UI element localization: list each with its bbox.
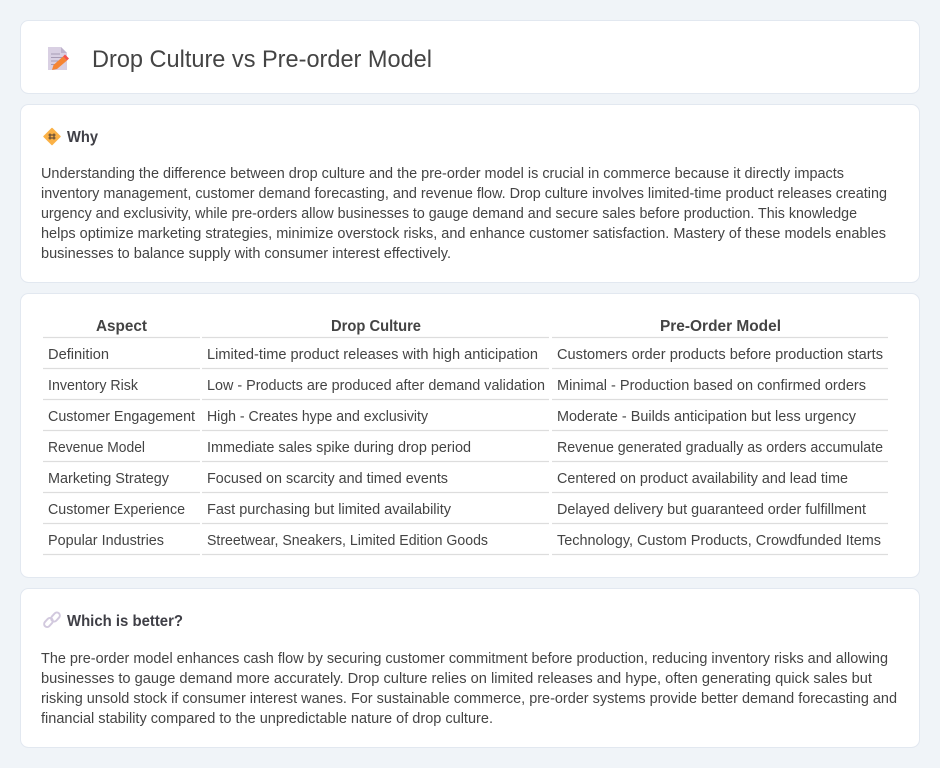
row: popular industries: Streetwear, Sneakers, Limited Edition Goods bbox=[207, 533, 488, 549]
table header bbox=[43, 318, 888, 338]
panel: comparison table bbox=[20, 294, 920, 578]
icon: document with pencil bbox=[48, 47, 69, 70]
row: customer engagement: High - Creates hype and exclusivity bbox=[207, 409, 429, 425]
row: customer engagement: Moderate - Builds anticipation but less urgency bbox=[557, 409, 857, 425]
row: customer engagement: Customer Engagement bbox=[48, 409, 195, 425]
row: customer experience: Customer Experience bbox=[48, 502, 185, 518]
row: revenue model: Revenue generated gradually as orders accumulate bbox=[557, 440, 883, 456]
table header: Pre-Order Model bbox=[660, 318, 781, 335]
row: definition: Customers order products before production starts bbox=[557, 347, 883, 363]
row: inventory risk: Low - Products are produced after demand validation bbox=[207, 378, 545, 394]
text block: why: Understanding the difference between drop culture and the pre-order model is crucial in commerce because it directly impacts bbox=[41, 166, 844, 182]
text block: which is better: businesses to gauge demand more accurately. Drop culture relies on limited releases and hype, often generating quick sales but bbox=[41, 671, 872, 687]
text block: which is better bbox=[41, 651, 897, 727]
panel: title bbox=[20, 20, 920, 94]
panel: which is better bbox=[20, 588, 920, 748]
text block: why bbox=[41, 166, 887, 262]
row: customer experience: Delayed delivery but guaranteed order fulfillment bbox=[557, 502, 866, 518]
row: customer experience: Fast purchasing but limited availability bbox=[207, 502, 452, 518]
text block: why: urgency and exclusivity, while pre-orders allow businesses to gauge demand and secure sales before production. This knowledge bbox=[41, 206, 857, 222]
row: revenue model: Revenue Model bbox=[48, 440, 145, 456]
icon: link bbox=[43, 611, 61, 628]
row: popular industries: Popular Industries bbox=[48, 533, 164, 549]
row: popular industries: Technology, Custom Products, Crowdfunded Items bbox=[557, 533, 881, 549]
text block: which is better: The pre-order model enhances cash flow by securing customer commitment before production, reducing inventory risks and allowing bbox=[41, 651, 888, 667]
text block: why: businesses to balance supply with consumer interest effectively. bbox=[41, 246, 451, 262]
row: definition: Limited-time product releases with high anticipation bbox=[207, 347, 538, 363]
row: inventory risk: Inventory Risk bbox=[48, 378, 139, 394]
title text: Drop Culture vs Pre-order Model bbox=[92, 46, 432, 73]
text block: which is better: financial stability compared to the unpredictable nature of drop culture. bbox=[41, 711, 493, 727]
panel: why bbox=[20, 104, 920, 282]
row: definition bbox=[43, 347, 888, 368]
row: marketing strategy: Marketing Strategy bbox=[48, 471, 170, 487]
row: marketing strategy: Focused on scarcity and timed events bbox=[207, 471, 448, 487]
row: revenue model: Immediate sales spike during drop period bbox=[207, 440, 471, 456]
row: customer experience bbox=[43, 502, 888, 524]
row: inventory risk: Minimal - Production based on confirmed orders bbox=[557, 378, 866, 394]
text block: why: inventory management, customer demand forecasting, and revenue flow. Drop culture involves limited-time product releases creating bbox=[41, 186, 887, 202]
row: customer engagement bbox=[43, 409, 888, 430]
text block: why: helps optimize marketing strategies, minimize overstock risks, and enhance customer satisfaction. Mastery of these models enables bbox=[41, 226, 886, 242]
text block: which is better: risking unsold stock if consumer interest wanes. For sustainable commerce, pre-order systems provide better demand forecasting and bbox=[41, 691, 897, 707]
row: definition: Definition bbox=[48, 347, 109, 363]
table header: Drop Culture bbox=[331, 318, 421, 335]
row: revenue model bbox=[43, 440, 888, 462]
heading: which is better: Which is better? bbox=[67, 613, 183, 630]
icon: warning diamond bbox=[44, 128, 60, 144]
heading: why: Why bbox=[67, 129, 98, 146]
row: popular industries bbox=[43, 533, 888, 554]
row: inventory risk bbox=[43, 378, 888, 400]
row: marketing strategy: Centered on product availability and lead time bbox=[557, 471, 848, 487]
row: marketing strategy bbox=[43, 471, 888, 492]
table header: Aspect bbox=[96, 318, 148, 335]
